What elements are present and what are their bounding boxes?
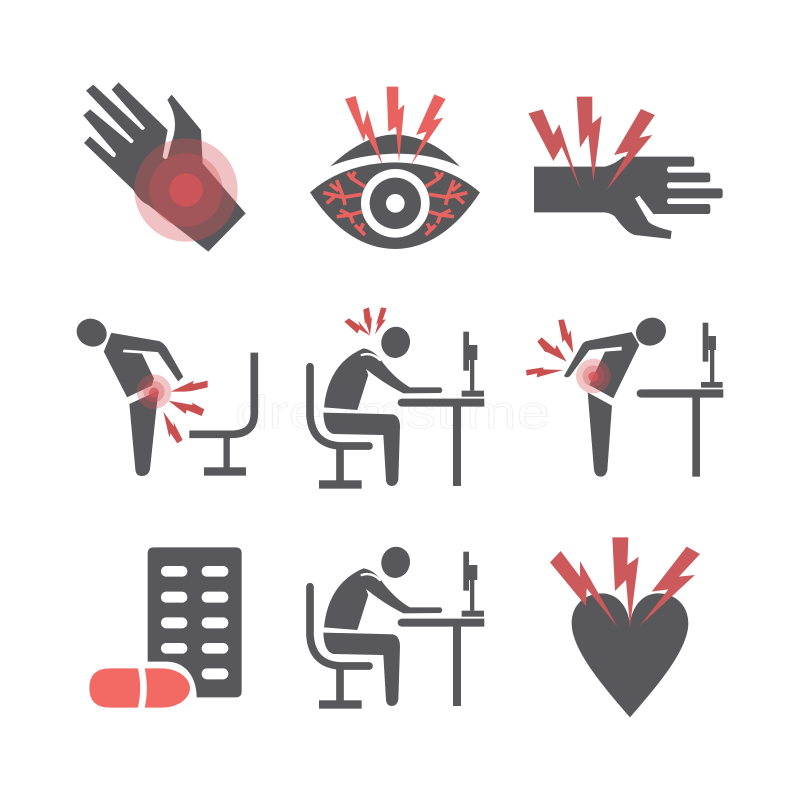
chair: [310, 367, 369, 489]
eyebrow: [330, 134, 460, 167]
shoulder slit: [362, 354, 380, 360]
icon: forearm and hand pain: [528, 97, 723, 239]
lightning bolts: [345, 87, 446, 165]
hand silhouette: [83, 82, 246, 252]
icon: seated worker with neck pain: [310, 307, 484, 489]
legs: [323, 633, 400, 706]
pain rings: [576, 359, 611, 393]
leg: [588, 392, 612, 477]
torso and arm: [324, 348, 442, 410]
desk: [398, 619, 484, 706]
head: [378, 324, 413, 361]
head: [378, 544, 413, 581]
desk: [637, 389, 723, 477]
head: [631, 313, 671, 351]
iris and pupil: [361, 169, 430, 238]
lightning bolts: [526, 319, 573, 377]
capsule: [89, 668, 190, 708]
icon: hand with wrist pain: [83, 82, 246, 252]
head: [72, 314, 111, 352]
lightning bolts: [550, 537, 700, 627]
icon: blister pack and capsule: [89, 547, 242, 709]
monitor: [701, 323, 723, 388]
capsule divider: [141, 667, 143, 709]
desk: [398, 399, 484, 486]
legs: [323, 413, 400, 486]
blister pack: [148, 547, 242, 697]
monitor: [462, 332, 484, 397]
eye outline: [310, 162, 480, 249]
shoulder slit: [362, 574, 380, 580]
torso and arm: [104, 333, 183, 397]
icon: person bending with hip pain beside chair: [72, 314, 254, 476]
torso and arm: [564, 332, 639, 398]
lightning bolts: [528, 97, 655, 190]
left veins: [323, 172, 365, 235]
torso and arm: [324, 568, 442, 630]
icon: heart with lightning: [550, 537, 700, 717]
icon: person bending with back pain at desk: [526, 313, 723, 477]
pain rings: [134, 138, 238, 242]
icon: bloodshot eye: [310, 87, 480, 249]
monitor: [462, 552, 484, 617]
lightning bolts: [344, 307, 387, 336]
leg: [129, 391, 158, 476]
arm and palm: [534, 157, 723, 239]
pain rings: [137, 374, 171, 409]
watermark: dreamstime: [235, 386, 550, 438]
chair: [189, 353, 254, 476]
lightning bolts: [163, 381, 208, 443]
chair: [310, 587, 369, 709]
blister pills: [161, 566, 228, 679]
right veins: [426, 172, 467, 235]
heart: [572, 593, 688, 717]
icon: seated worker at desk: [310, 544, 484, 709]
